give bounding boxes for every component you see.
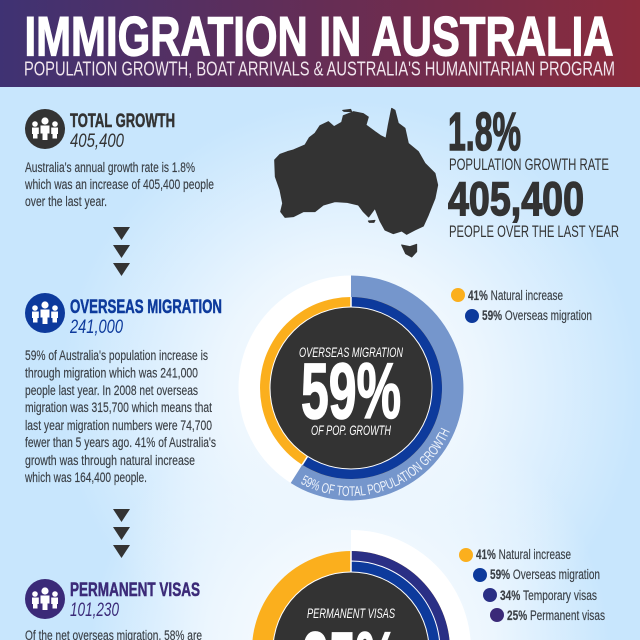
stat: 1.8%: 1.8% [448,102,521,162]
centre label top: OVERSEAS MIGRATION [299,344,404,360]
legend item: natural increase: 41% Natural increase [476,547,571,562]
legend: permanent visas [459,547,605,623]
value: 101,230: 101,230 [70,600,119,621]
text block: overseas migration: people last year. In 2008 net overseas [25,383,198,398]
arrows: down 1 [113,227,130,276]
heading: total growth: TOTAL GROWTH [70,111,175,132]
legend item: natural increase: 41% Natural increase [468,288,563,303]
text block: overseas migration: through migration which was 241,000 [25,366,198,380]
legend item: natural increase [451,288,563,303]
text block: total growth: over the last year. [25,194,107,209]
text block: total growth: Australia's annual growth rate is 1.8% [25,160,195,175]
panel: overseas migration [24,293,222,485]
legend item: overseas migration [473,567,600,582]
legend item: temporary visas [483,588,597,603]
heading: overseas migration: OVERSEAS MIGRATION [70,297,222,318]
panel: total growth [24,109,214,209]
text block: overseas migration: fewer than 5 years ago. 41% of Australia's [25,435,216,450]
ring label: 59% OF TOTAL POPULATION GROWTH [301,428,450,496]
legend item: temporary visas: 34% Temporary visas [500,588,597,603]
icon: people blue [25,293,65,333]
centre value: 59% [301,346,401,435]
donut chart: permanent visas [252,530,471,640]
donut chart: overseas migration [238,276,464,500]
text block: overseas migration: which was 164,400 people. [24,470,147,485]
text block: overseas migration [24,348,216,485]
icon: people purple [25,579,65,619]
legend item: natural increase [459,547,571,562]
stat: 405,400: 405,400 [448,172,584,225]
legend item: permanent visas: 25% Permanent visas [507,608,605,623]
value: 405,400: 405,400 [70,131,124,152]
legend: overseas migration [451,288,592,323]
header banner [0,0,640,87]
legend item: overseas migration: 59% Overseas migration [482,308,592,323]
icon: people dark [25,109,65,149]
text block: overseas migration: 59% of Australia's population increase is [25,348,208,363]
text block: overseas migration: growth was through natural increase [25,453,195,468]
legend item: overseas migration [465,308,592,323]
legend item: overseas migration: 59% Overseas migration [490,567,600,582]
legend item: permanent visas [490,608,605,623]
value: 241,000: 241,000 [69,317,123,338]
centre label bottom: OF POP. GROWTH [311,422,392,438]
map: Australia [275,108,438,257]
centre label top: PERMANENT VISAS [307,605,395,621]
arrows: down 2 [113,509,130,558]
text block: overseas migration: migration was 315,700 which means that [25,400,212,415]
text block: overseas migration: last year migration numbers were 74,700 [25,418,212,433]
text block: total growth [24,160,214,209]
stats: growth rate [448,102,619,241]
heading: permanent visas: PERMANENT VISAS [70,580,200,601]
text block: total growth: which was an increase of 405,400 people [24,177,214,192]
panel: permanent visas [25,579,202,640]
